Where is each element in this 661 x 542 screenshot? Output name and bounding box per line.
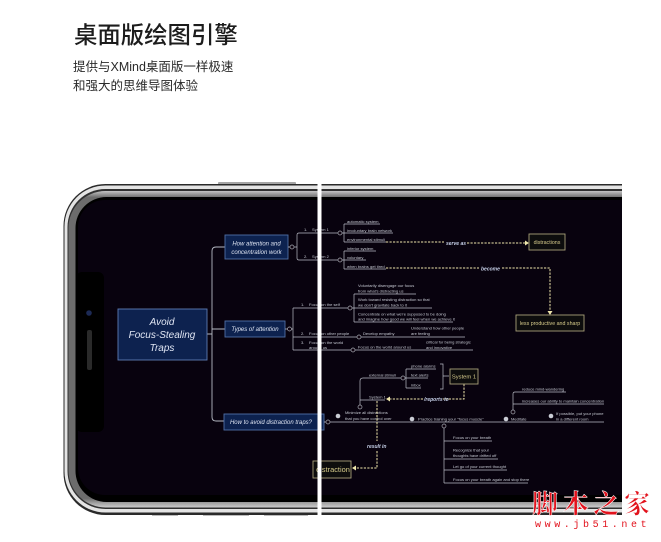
branch: systems: System 2: [312, 254, 330, 259]
branch: systems: System 1: [312, 227, 330, 232]
node: distraction: [313, 461, 351, 478]
branch: focus types: 2.: [301, 331, 304, 336]
branch: systems: voluntary: [347, 255, 364, 260]
branch: avoiding distraction: that you have control over: [345, 416, 392, 421]
relationship: serve as: serve as: [446, 241, 466, 247]
node: distractions: [529, 234, 565, 250]
branch: avoiding distraction: increases our ability to maintain concentration: [522, 398, 604, 404]
relationship: serve as: [386, 240, 529, 247]
topic: types of attention: Types of attention: [231, 327, 279, 333]
branch: focus types: and imagine how good we will feel when we achieve it: [358, 316, 456, 322]
central topic: Traps: [150, 343, 174, 354]
branch: avoiding distraction: Let go of your current thought: [453, 464, 507, 469]
branch: avoiding distraction: Recognize that your: [453, 448, 490, 452]
branch: systems: [288, 219, 393, 269]
topic: how attention works: concentration work: [231, 250, 283, 256]
branch: systems: automatic system: [347, 219, 379, 224]
branch: systems: when brains get tired: [347, 264, 385, 269]
branch: avoiding distraction: Meditate: [511, 416, 527, 422]
node: distraction: distraction: [316, 465, 350, 474]
branch: focus types: 1.: [301, 302, 304, 307]
title: 桌面版绘图引擎: [74, 22, 238, 48]
branch: avoiding distraction: thoughts have drifted off: [453, 453, 497, 458]
notch: [76, 272, 104, 432]
topic: types of attention: [225, 321, 285, 337]
relationship: become: [386, 266, 552, 315]
relationship: reports to: [386, 384, 464, 403]
branch: avoiding distraction: [324, 364, 604, 483]
connectors: trunk: [207, 247, 225, 421]
branch: systems: inferior system: [347, 246, 374, 251]
branch: focus types: [285, 283, 473, 352]
branch: focus types: Focus on other people: [309, 331, 350, 336]
branch: focus types: Understand how other people: [411, 326, 465, 330]
branch: systems: environmental stimuli: [347, 237, 385, 242]
phone frame: [64, 182, 661, 516]
subtitle: 提供与XMind桌面版一样极速: [73, 59, 234, 74]
watermark: 脚本之家: [532, 484, 655, 521]
white divider: [318, 180, 322, 515]
branch: focus types: 3.: [301, 340, 304, 345]
watermark: www.jb51.net: [535, 519, 650, 531]
front camera: [86, 310, 92, 316]
relationship: become: become: [481, 266, 500, 272]
relationship: result in: [352, 401, 386, 470]
topic: avoid distraction traps: How to avoid distraction traps?: [230, 420, 313, 426]
branch: avoiding distraction: If possible, put your phone: [556, 411, 604, 416]
node: less productive and sharp: [516, 315, 584, 331]
topic: how attention works: How attention and: [232, 242, 281, 248]
branch: focus types: from what's distracting us: [358, 288, 404, 294]
branch: focus types: Develop empathy: [363, 331, 395, 336]
branch: avoiding distraction: phone alarms: [411, 364, 436, 368]
branch: avoiding distraction: in a different room: [556, 416, 589, 422]
branch: systems: 1.: [304, 227, 307, 232]
branch: focus types: are feeling: [411, 331, 430, 336]
branch: avoiding distraction: Minimize all distractions: [345, 410, 388, 415]
branch: avoiding distraction: external stimuli: [369, 372, 396, 378]
branch: focus types: Work toward resisting distraction so that: [358, 297, 431, 302]
branch: avoiding distraction: Practice training your "focus muscle": [418, 416, 484, 422]
summary bracket: [440, 364, 449, 389]
subtitle: 和强大的思维导图体验: [73, 78, 199, 93]
branch: focus types: Concentrate on what we're supposed to be doing: [358, 312, 446, 316]
topic: how attention works: [225, 235, 288, 259]
central topic: [118, 309, 207, 360]
central topic: Focus-Stealing: [129, 330, 196, 341]
branch: focus types: Focus on the self: [309, 302, 341, 307]
relationship: result in: result in: [367, 444, 386, 450]
node: system 1: System 1: [452, 374, 476, 380]
branch: avoiding distraction: Focus on your breath: [453, 435, 491, 440]
branch: avoiding distraction: inbox: [411, 382, 421, 388]
branch: avoiding distraction: reduce mind-wandering: [522, 386, 564, 392]
branch: avoiding distraction: System 1: [369, 394, 387, 400]
branch: focus types: critical for being strategic: [426, 340, 471, 344]
branch: systems: 2.: [304, 254, 307, 259]
mind map: [118, 219, 604, 483]
phone screen: [78, 200, 661, 495]
speaker: [87, 330, 92, 370]
topic: avoid distraction traps: [224, 414, 324, 430]
branch: focus types: Focus on the world around us: [358, 344, 411, 350]
subtitle: [73, 59, 234, 93]
branch: avoiding distraction: text alerts: [411, 372, 429, 378]
branch: focus types: we don't gravitate back to it: [358, 302, 408, 308]
relationship: reports to: /reports to: [423, 397, 449, 403]
node: less productive and sharp: less productive and sharp: [520, 321, 580, 327]
branch: focus types: and innovative: [426, 345, 453, 350]
central topic: Avoid: [149, 317, 175, 328]
branch: systems: involuntary brain network: [347, 228, 393, 233]
branch: focus types: around us: [309, 345, 327, 350]
branch: focus types: Focus on the world: [309, 340, 343, 345]
branch: avoiding distraction: Focus on your breath again and stop there: [453, 477, 530, 482]
node: distractions: distractions: [534, 240, 561, 246]
node: system 1: [450, 369, 478, 384]
branch: focus types: Voluntarily disengage our focus: [358, 283, 414, 288]
